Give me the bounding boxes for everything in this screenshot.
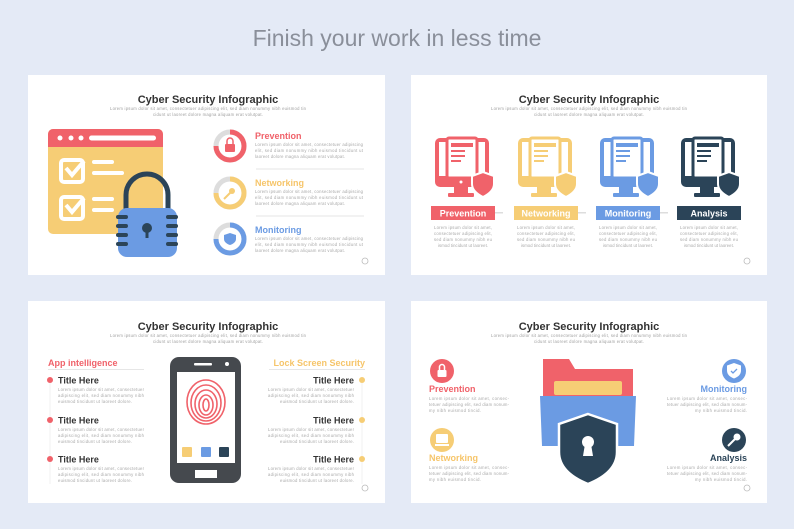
list: app intelligence xyxy=(47,358,145,484)
step: monitoring xyxy=(596,138,660,248)
item: analysis xyxy=(667,428,748,482)
panel: top-left xyxy=(28,75,385,275)
list: lock screen security: adipiscing elit, sed diam nonummy nibh xyxy=(268,433,355,438)
title: Cyber Security Infographic xyxy=(519,94,659,106)
item: monitoring: my nibh euismod tincid. xyxy=(695,408,747,413)
item: networking: tetuer adipiscing elit, sed diam nonum- xyxy=(429,471,510,476)
item: monitoring: tetuer adipiscing elit, sed diam nonum- xyxy=(667,402,748,407)
step: prevention: Lorem ipsum dolor sit amet, xyxy=(434,225,492,230)
list: app intelligence: Title Here xyxy=(58,416,99,426)
subtitle: cidunt ut laoreet dolore magna aliquam erat volutpat. xyxy=(153,339,263,344)
subtitle: cidunt ut laoreet dolore magna aliquam erat volutpat. xyxy=(534,339,644,344)
item: networking: Lorem ipsum dolor sit amet, consec- xyxy=(429,465,510,470)
item: monitoring: Monitoring xyxy=(700,384,747,394)
step: prevention: ismod tincidunt ut laoreet. xyxy=(438,243,488,248)
subtitle: Lorem ipsum dolor sit amet, consectetuer adipiscing elit, sed diam nonummy nibh euismod tin xyxy=(110,333,307,338)
step: monitoring: Monitoring xyxy=(605,208,651,218)
step: analysis xyxy=(677,138,741,248)
subtitle xyxy=(110,106,307,117)
title: Cyber Security Infographic xyxy=(138,321,278,333)
item: analysis: Lorem ipsum dolor sit amet, consec- xyxy=(667,465,748,470)
item: prevention: tetuer adipiscing elit, sed diam nonum- xyxy=(429,402,510,407)
list: app intelligence: euismod tincidunt ut laoreet dolore. xyxy=(58,439,132,444)
icon: browser checklist xyxy=(48,129,163,234)
subtitle: Lorem ipsum dolor sit amet, consectetuer adipiscing elit, sed diam nonummy nibh euismod tin xyxy=(491,333,688,338)
step: networking xyxy=(514,138,578,248)
item: prevention xyxy=(216,131,364,160)
step: analysis: consectetuer adipiscing elit, xyxy=(680,231,738,236)
list: app intelligence: Title Here xyxy=(58,376,99,386)
list: lock screen security: Lorem ipsum dolor sit amet, consectetuer xyxy=(268,387,355,392)
list: lock screen security: Lock Screen Security xyxy=(273,358,365,368)
item: analysis: Analysis xyxy=(710,453,747,463)
item: prevention: Prevention xyxy=(429,384,476,394)
subtitle: cidunt ut laoreet dolore magna aliquam erat volutpat. xyxy=(534,112,644,117)
list: app intelligence: App intelligence xyxy=(48,358,118,368)
item: prevention: Lorem ipsum dolor sit amet, consec- xyxy=(429,396,510,401)
list: lock screen security: adipiscing elit, sed diam nonummy nibh xyxy=(268,472,355,477)
list: lock screen security: euismod tincidunt ut laoreet dolore. xyxy=(280,478,354,483)
list: lock screen security: Lorem ipsum dolor sit amet, consectetuer xyxy=(268,427,355,432)
list: lock screen security: Title Here xyxy=(313,376,354,386)
item: networking: laoreet dolore magna aliquam erat volutpat. xyxy=(255,201,345,206)
item: prevention: Lorem ipsum dolor sit amet, consectetuer adipiscing xyxy=(255,142,364,147)
panel: bottom-left xyxy=(28,301,385,503)
step: monitoring: Lorem ipsum dolor sit amet, xyxy=(599,225,657,230)
list: lock screen security: euismod tincidunt ut laoreet dolore. xyxy=(280,399,354,404)
step: prevention: Prevention xyxy=(440,208,486,218)
step: analysis: Lorem ipsum dolor sit amet, xyxy=(680,225,738,230)
item: networking: elit, sed diam nonummy nibh euismod tincidunt ut xyxy=(255,195,364,200)
subtitle xyxy=(491,333,688,344)
item: monitoring: Lorem ipsum dolor sit amet, consectetuer adipiscing xyxy=(255,236,364,241)
list: lock screen security: Title Here xyxy=(313,454,354,464)
step: monitoring: consectetuer adipiscing elit, xyxy=(599,231,657,236)
subtitle: Lorem ipsum dolor sit amet, consectetuer adipiscing elit, sed diam nonummy nibh euismod tin xyxy=(491,106,688,111)
item: networking: my nibh euismod tincid. xyxy=(429,477,481,482)
panel: top-right xyxy=(411,75,767,275)
list: app intelligence: adipiscing elit, sed diam nonummy nibh xyxy=(58,472,145,477)
item: prevention: laoreet dolore magna aliquam erat volutpat. xyxy=(255,154,345,159)
subtitle xyxy=(491,106,688,117)
heading: Finish your work in less time xyxy=(253,25,541,51)
list: app intelligence: adipiscing elit, sed diam nonummy nibh xyxy=(58,433,145,438)
item: monitoring: Lorem ipsum dolor sit amet, consec- xyxy=(667,396,748,401)
item: networking: Networking xyxy=(255,178,304,188)
step: networking: Networking xyxy=(521,208,571,218)
subtitle: cidunt ut laoreet dolore magna aliquam erat volutpat. xyxy=(153,112,263,117)
item: monitoring: elit, sed diam nonummy nibh euismod tincidunt ut xyxy=(255,242,364,247)
step: analysis: sed diam nonummy nibh eu xyxy=(680,237,739,242)
list: app intelligence: Lorem ipsum dolor sit amet, consectetuer xyxy=(58,466,145,471)
list: app intelligence: Lorem ipsum dolor sit amet, consectetuer xyxy=(58,427,145,432)
item: monitoring: laoreet dolore magna aliquam erat volutpat. xyxy=(255,248,345,253)
list: lock screen security xyxy=(268,358,365,484)
list: app intelligence: Lorem ipsum dolor sit amet, consectetuer xyxy=(58,387,145,392)
icon: folder with shield xyxy=(540,359,636,484)
step: analysis: Analysis xyxy=(690,208,728,218)
list: app intelligence: Title Here xyxy=(58,454,99,464)
panel: bottom-right xyxy=(411,301,767,503)
item: analysis: my nibh euismod tincid. xyxy=(695,477,747,482)
step: monitoring: ismod tincidunt ut laoreet. xyxy=(603,243,653,248)
step: prevention: sed diam nonummy nibh eu xyxy=(434,237,493,242)
item: prevention: Prevention xyxy=(255,131,302,141)
item: prevention: my nibh euismod tincid. xyxy=(429,408,481,413)
item: networking xyxy=(216,178,364,207)
item: analysis: tetuer adipiscing elit, sed diam nonum- xyxy=(667,471,748,476)
icon: padlock xyxy=(116,174,178,257)
item: networking: Networking xyxy=(429,453,478,463)
list: lock screen security: Lorem ipsum dolor sit amet, consectetuer xyxy=(268,466,355,471)
list: lock screen security: adipiscing elit, sed diam nonummy nibh xyxy=(268,393,355,398)
step: prevention: consectetuer adipiscing elit, xyxy=(434,231,492,236)
step: networking: consectetuer adipiscing elit, xyxy=(517,231,575,236)
step: monitoring: sed diam nonummy nibh eu xyxy=(599,237,658,242)
list: app intelligence: euismod tincidunt ut laoreet dolore. xyxy=(58,478,132,483)
step: analysis: ismod tincidunt ut laoreet. xyxy=(684,243,734,248)
step: networking: Lorem ipsum dolor sit amet, xyxy=(517,225,575,230)
step: networking: sed diam nonummy nibh eu xyxy=(517,237,576,242)
list: app intelligence: euismod tincidunt ut laoreet dolore. xyxy=(58,399,132,404)
step: prevention xyxy=(431,138,495,248)
label: prevention xyxy=(431,206,495,220)
item: networking: Lorem ipsum dolor sit amet, consectetuer adipiscing xyxy=(255,189,364,194)
item: networking xyxy=(429,428,510,482)
subtitle xyxy=(110,333,307,344)
item: monitoring xyxy=(667,359,748,413)
subtitle: Lorem ipsum dolor sit amet, consectetuer adipiscing elit, sed diam nonummy nibh euismod tin xyxy=(110,106,307,111)
list: app intelligence: adipiscing elit, sed diam nonummy nibh xyxy=(58,393,145,398)
list: lock screen security: Title Here xyxy=(313,416,354,426)
title: Cyber Security Infographic xyxy=(138,94,278,106)
item: prevention: elit, sed diam nonummy nibh euismod tincidunt ut xyxy=(255,148,364,153)
item: monitoring xyxy=(216,225,364,253)
item: prevention xyxy=(429,359,510,413)
icon: phone with fingerprint xyxy=(170,357,241,483)
item: monitoring: Monitoring xyxy=(255,225,302,235)
title: Cyber Security Infographic xyxy=(519,321,659,333)
list: lock screen security: euismod tincidunt ut laoreet dolore. xyxy=(280,439,354,444)
step: networking: ismod tincidunt ut laoreet. xyxy=(521,243,571,248)
